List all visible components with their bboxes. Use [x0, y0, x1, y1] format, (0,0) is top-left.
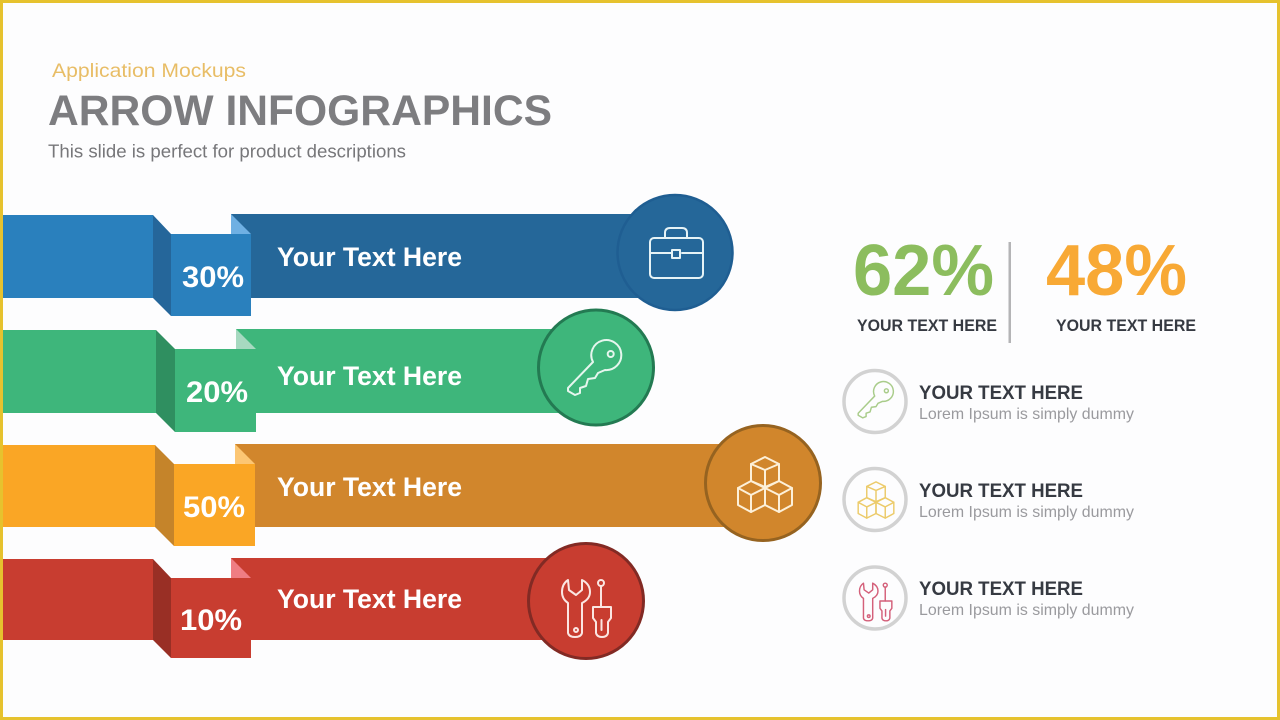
stat: 48%: 48%	[1046, 231, 1187, 311]
list item: key	[844, 370, 1134, 432]
stat: 62%: 62%	[853, 231, 994, 311]
item text: Lorem Ipsum is simply dummy	[919, 602, 1134, 619]
arrow band: green 20%	[3, 329, 560, 432]
item text: Lorem Ipsum is simply dummy	[919, 406, 1134, 423]
list item: tools	[844, 567, 1134, 629]
list item: cubes	[844, 468, 1134, 530]
icon: cubes circle	[706, 426, 820, 540]
item heading: YOUR TEXT HERE	[919, 578, 1083, 600]
item heading: YOUR TEXT HERE	[919, 480, 1083, 502]
percentage 20%: 20%	[186, 376, 248, 409]
band label: Your Text Here	[277, 242, 462, 272]
title: ARROW INFOGRAPHICS	[48, 87, 552, 135]
stat caption: YOUR TEXT HERE	[1056, 317, 1196, 335]
arrow band: red 10%	[3, 558, 550, 658]
stat caption: YOUR TEXT HERE	[857, 317, 997, 335]
subtitle: This slide is perfect for product descriptions	[48, 142, 406, 162]
arrow band: blue 30%	[3, 214, 640, 316]
percentage 10%: 10%	[180, 604, 242, 637]
band label: Your Text Here	[277, 472, 462, 502]
divider	[1008, 242, 1011, 343]
band label: Your Text Here	[277, 584, 462, 614]
icon: briefcase circle	[618, 195, 732, 310]
icon: tools circle	[528, 544, 644, 658]
item heading: YOUR TEXT HERE	[919, 382, 1083, 404]
small label: Application Mockups: Application Mockups	[52, 60, 246, 82]
percentage 30%: 30%	[182, 261, 244, 294]
item text: Lorem Ipsum is simply dummy	[919, 504, 1134, 521]
arrow band: orange 50%	[3, 444, 730, 546]
icon: key circle	[538, 310, 654, 425]
percentage 50%: 50%	[183, 491, 245, 524]
band label: Your Text Here	[277, 361, 462, 391]
